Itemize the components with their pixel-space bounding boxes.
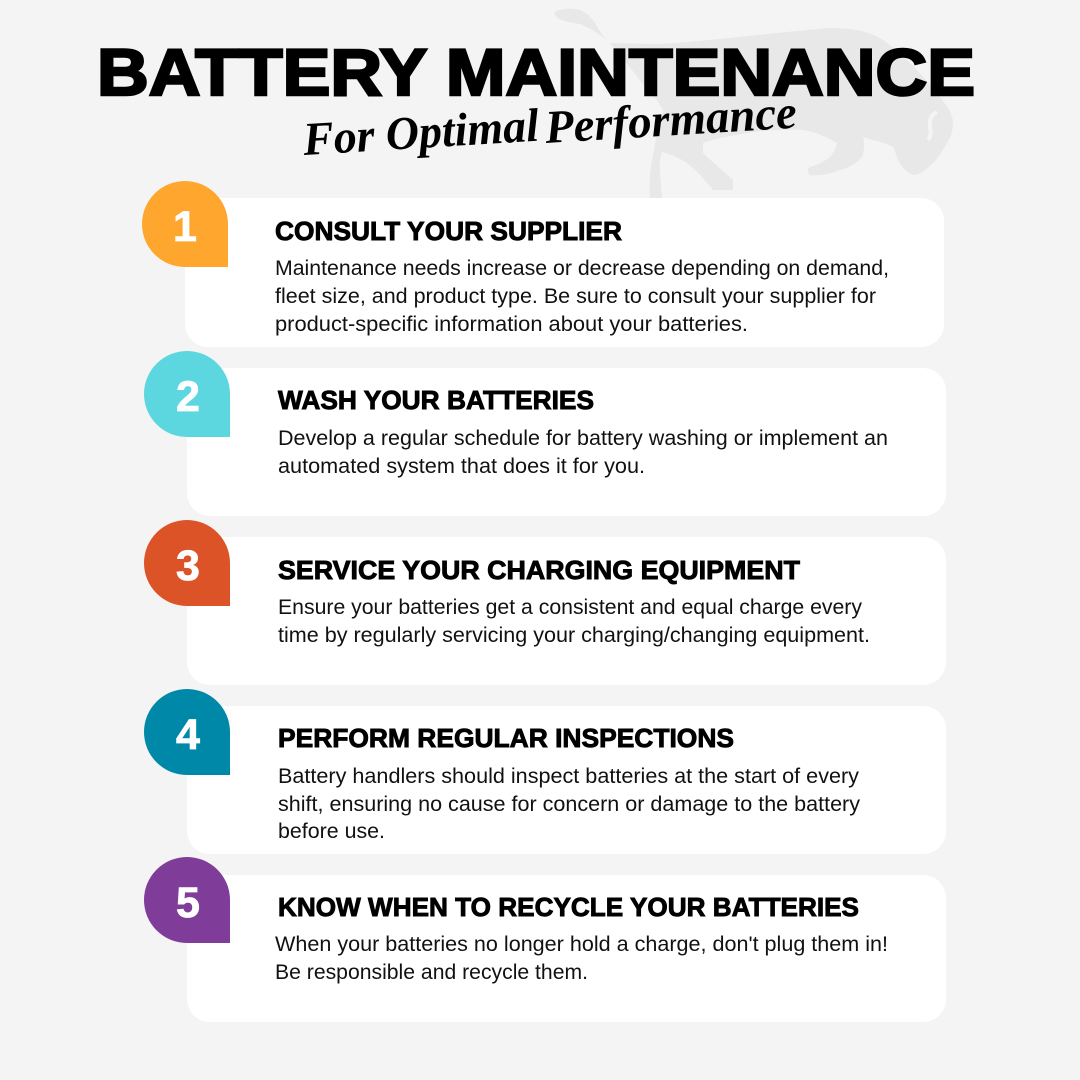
body text 1 [275, 257, 889, 336]
icon: number 1 badge: 1 [173, 203, 197, 251]
icon: number 3 badge: 3 [176, 542, 200, 590]
panel: step 4 perform regular inspections [144, 689, 946, 854]
body text 5: When your batteries no longer hold a charge, don't plug them in! [275, 933, 888, 956]
body text 1: fleet size, and product type. Be sure to consult your supplier for [275, 285, 876, 308]
card 1 background [185, 198, 944, 347]
subtitle: For Optimal [301, 100, 540, 166]
body text 5 [275, 933, 888, 984]
subtitle [301, 87, 798, 166]
body text 3 [278, 596, 870, 647]
heading 5: KNOW WHEN TO RECYCLE YOUR BATTERIES [278, 892, 859, 922]
panel: step 5 know when to recycle [144, 857, 946, 1022]
body text 4: Battery handlers should inspect batteries at the start of every [278, 765, 859, 788]
panel: step 2 wash your batteries [144, 351, 946, 516]
icon: number 2 badge: 2 [176, 373, 200, 421]
icon: number 2 badge [144, 351, 230, 437]
card 3 background [187, 537, 946, 685]
body text 2: automated system that does it for you. [278, 455, 645, 478]
panel: step 3 service your charging equipment [144, 520, 946, 685]
subtitle: Performance [543, 87, 798, 154]
card 2 background [187, 368, 946, 516]
heading 1: CONSULT YOUR SUPPLIER [275, 216, 622, 246]
body text 3: Ensure your batteries get a consistent and equal charge every [278, 596, 862, 619]
title: BATTERY MAINTENANCE [97, 35, 975, 109]
heading 2: WASH YOUR BATTERIES [278, 385, 594, 415]
icon: number 5 badge [144, 857, 230, 943]
body text 4 [278, 765, 861, 843]
body text 3: time by regularly servicing your charging/changing equipment. [278, 624, 870, 647]
icon: number 3 badge [144, 520, 230, 606]
icon: number 5 badge: 5 [176, 879, 200, 927]
card 4 background [187, 706, 946, 854]
body text 1: product-specific information about your batteries. [275, 313, 748, 336]
icon: bull watermark [555, 9, 953, 198]
panel: step 1 consult your supplier [142, 181, 944, 347]
heading 4: PERFORM REGULAR INSPECTIONS [278, 723, 734, 753]
icon: number 4 badge: 4 [176, 711, 200, 759]
body text 2: Develop a regular schedule for battery washing or implement an [278, 427, 888, 450]
icon: number 4 badge [144, 689, 230, 775]
body text 2 [278, 427, 888, 478]
body text 4: before use. [278, 820, 385, 843]
icon: number 1 badge [142, 181, 228, 267]
body text 5: Be responsible and recycle them. [275, 961, 588, 984]
card 5 background [187, 875, 946, 1022]
body text 4: shift, ensuring no cause for concern or damage to the battery [278, 793, 861, 816]
heading 3: SERVICE YOUR CHARGING EQUIPMENT [278, 555, 800, 585]
body text 1: Maintenance needs increase or decrease depending on demand, [275, 257, 889, 280]
